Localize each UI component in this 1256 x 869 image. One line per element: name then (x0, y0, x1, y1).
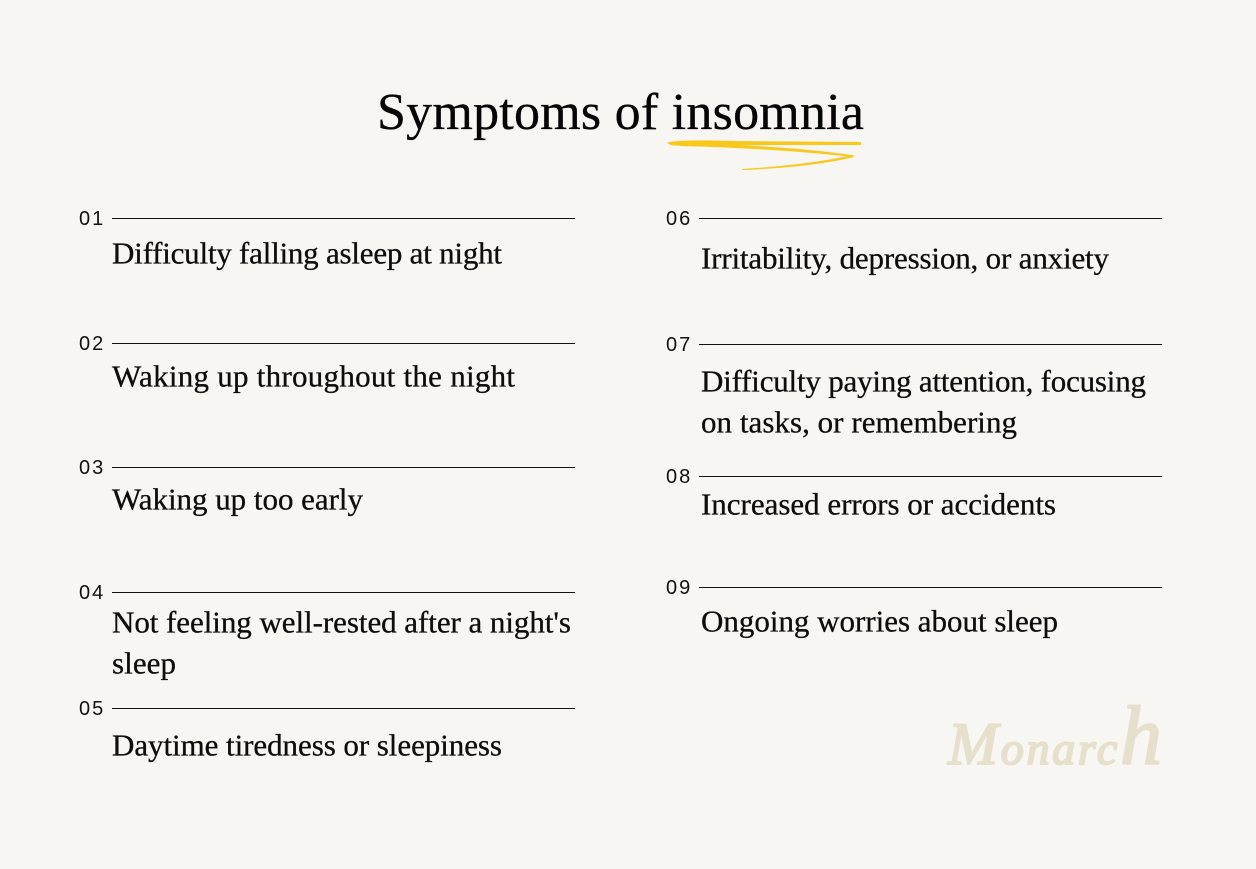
item 08: Increased errors or accidents (701, 486, 1056, 522)
item 02: Waking up throughout the night (112, 358, 515, 394)
item 04: 04 (79, 582, 105, 604)
item 03: Waking up too early (112, 482, 364, 516)
title: Symptoms of insomnia (377, 84, 864, 141)
item 06: 06 (666, 208, 692, 230)
item 04 (79, 582, 575, 680)
item 01 (79, 208, 575, 270)
item 03: 03 (79, 457, 105, 479)
item 09: Ongoing worries about sleep (701, 604, 1058, 638)
item 06: Irritability, depression, or anxiety (701, 240, 1110, 276)
logo: Monarch wordmark: Monarch (947, 690, 1162, 783)
item 01: 01 (79, 208, 105, 230)
item 02: 02 (79, 333, 105, 355)
item 04: Not feeling well-rested after a night's (112, 604, 571, 640)
item 07 (666, 334, 1162, 440)
item 09: 09 (666, 577, 692, 599)
item 04: sleep (112, 646, 176, 680)
item 05: Daytime tiredness or sleepiness (112, 728, 502, 762)
item 07: 07 (666, 334, 692, 356)
item 06 (666, 208, 1162, 276)
item 07: on tasks, or remembering (701, 404, 1017, 440)
item 05: 05 (79, 698, 105, 720)
item 08 (666, 466, 1162, 522)
item 02 (79, 333, 575, 394)
icon: yellow underline scribble (667, 140, 861, 170)
item 03 (79, 457, 575, 516)
item 05 (79, 698, 575, 762)
item 07: Difficulty paying attention, focusing (701, 364, 1146, 398)
item 09 (666, 577, 1162, 638)
item 08: 08 (666, 466, 692, 488)
item 01: Difficulty falling asleep at night (112, 236, 502, 270)
